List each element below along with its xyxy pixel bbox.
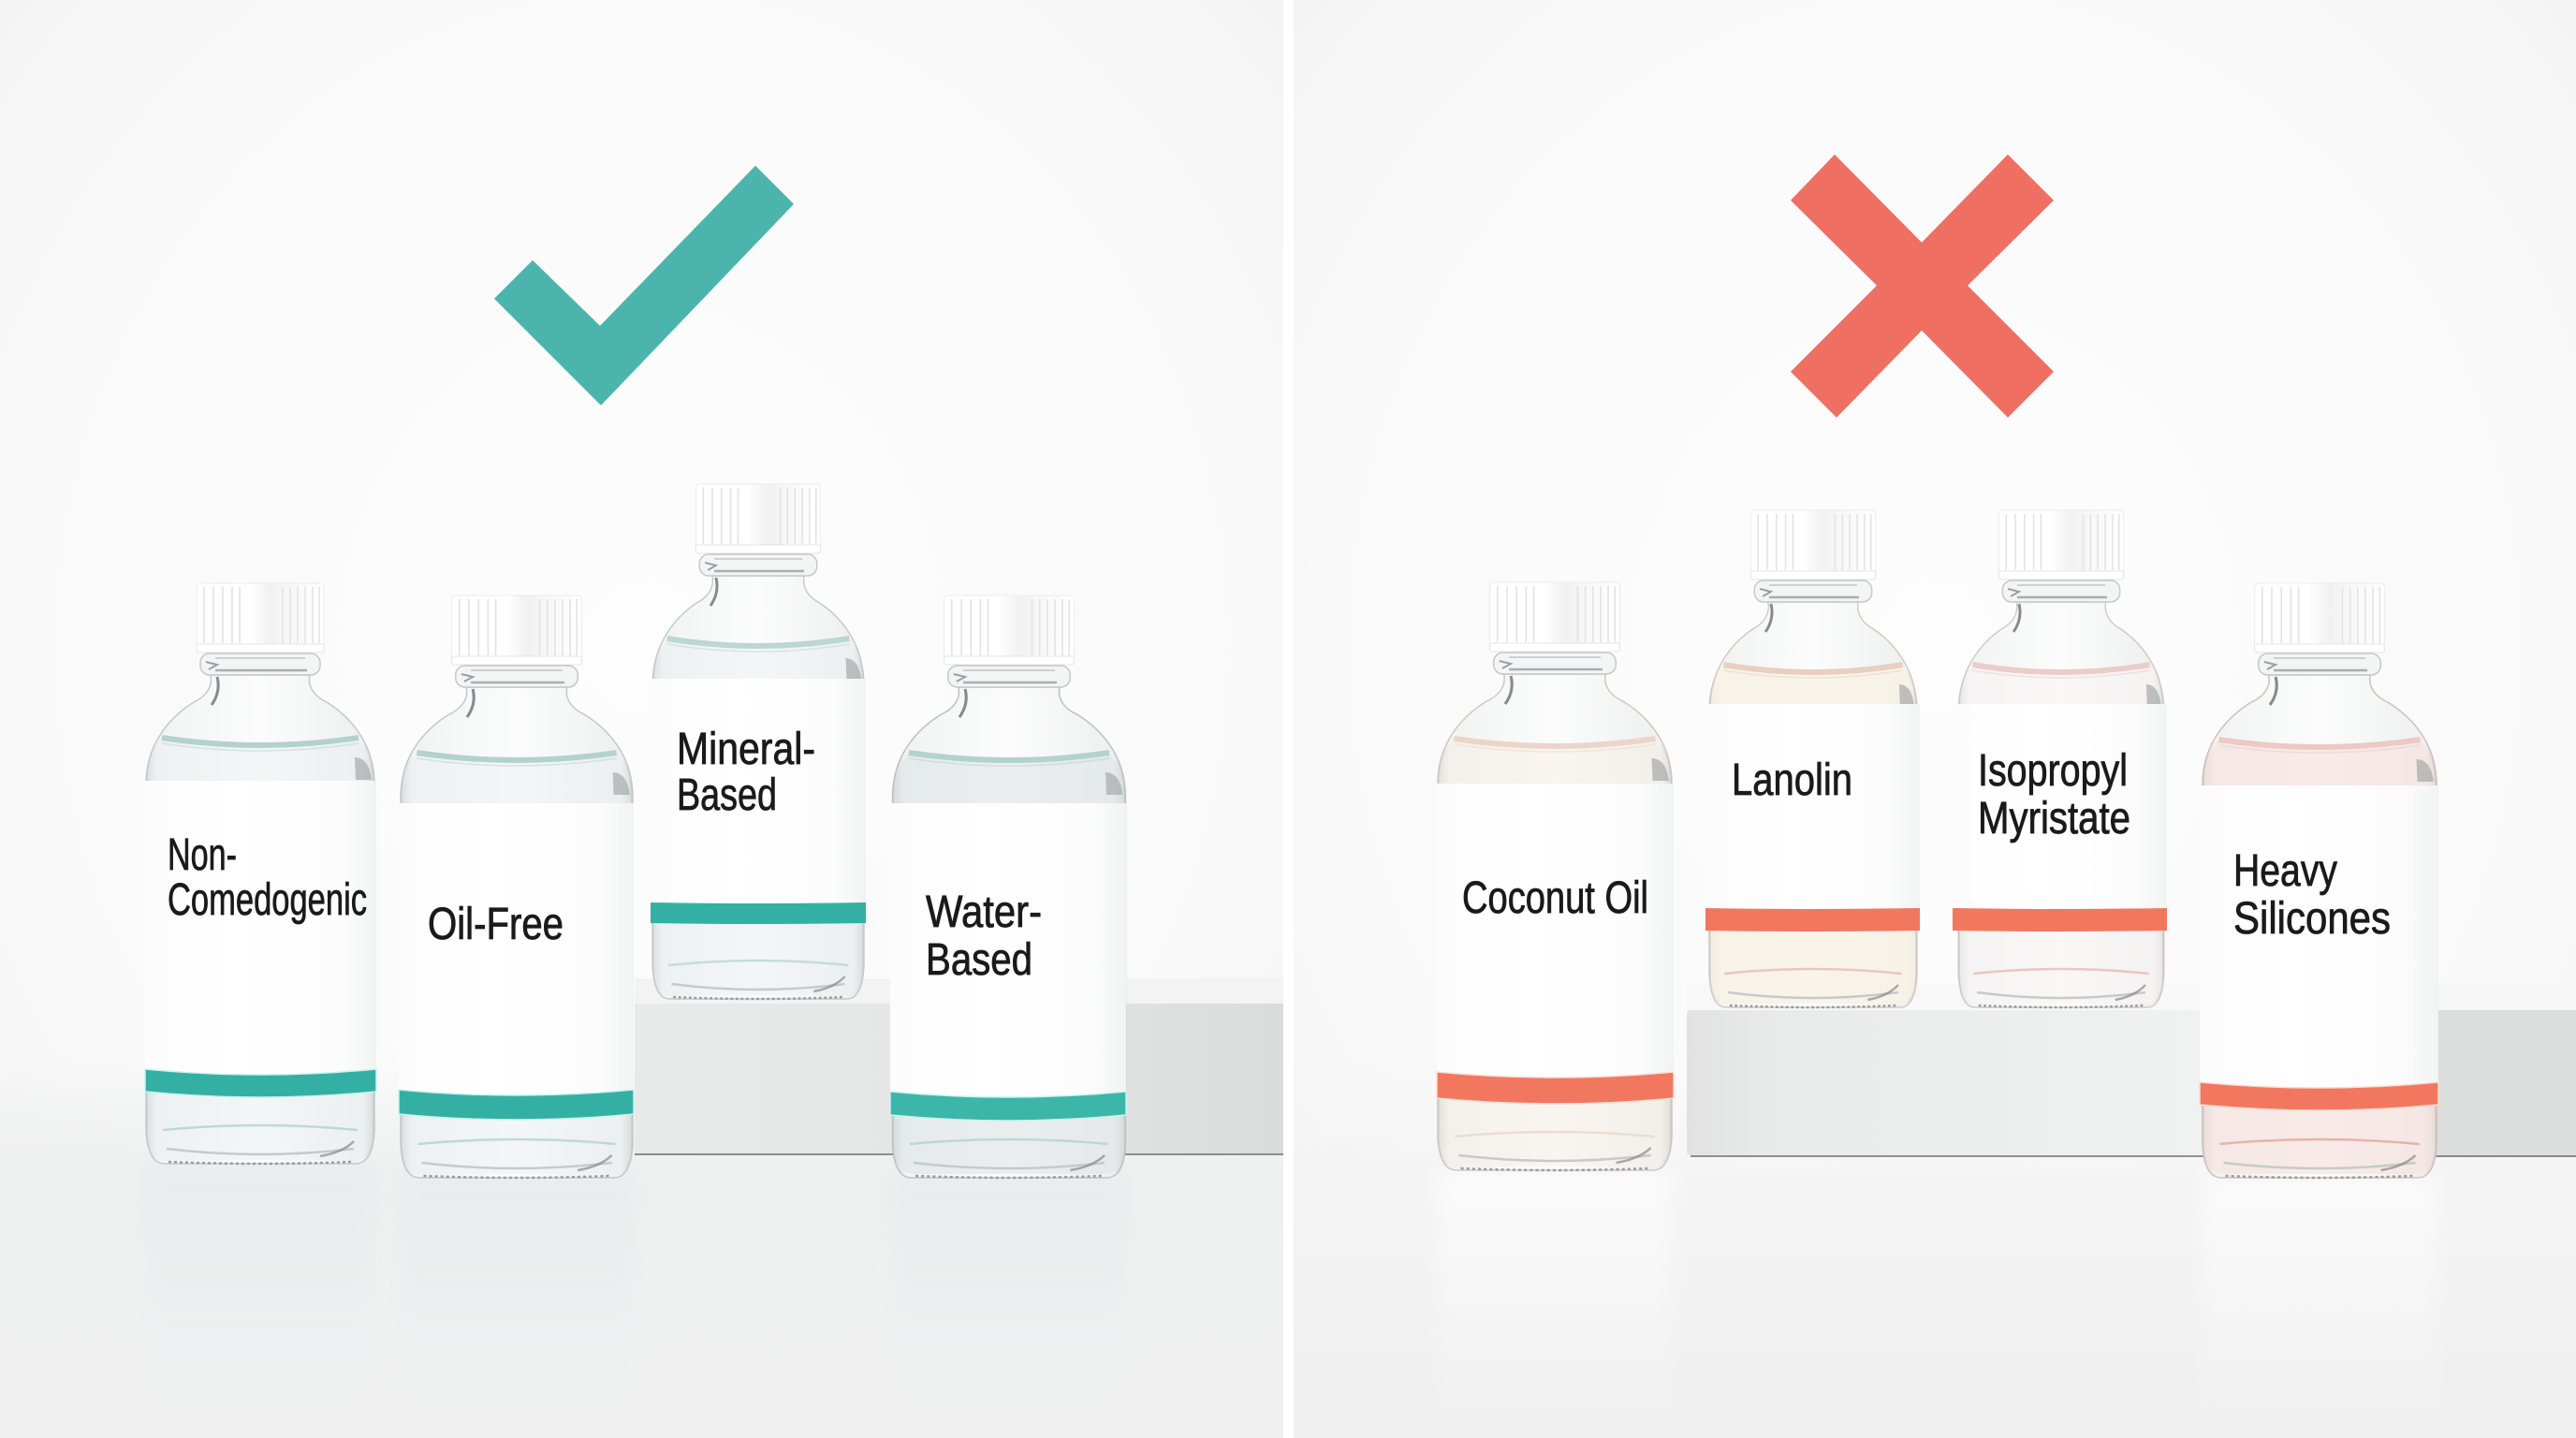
label text: Coconut Oil: Coconut Oil (1462, 873, 1648, 923)
label text: Non-Comedogenic: Non- (168, 830, 237, 880)
label text: Heavy Silicones (2233, 846, 2391, 944)
bottle: Mineral-Based (651, 484, 866, 999)
bottle: Non-Comedogenic (145, 583, 376, 1438)
label text: Isopropyl Myristate: Isopropyl (1978, 746, 2128, 796)
platform: right display step (2424, 984, 2576, 1157)
bottle: Lanolin (1705, 510, 1920, 1007)
label text: Water-Based: Water- (926, 888, 1042, 937)
label text: Isopropyl Myristate (1978, 746, 2130, 844)
bottle: Heavy Silicones (2200, 583, 2438, 1438)
bottle: Coconut Oil (1437, 582, 1674, 1438)
bottle: Oil-Free (399, 595, 634, 1438)
label text: Water-Based: Based (926, 935, 1032, 985)
icon: teal check mark (494, 166, 794, 405)
label text: Heavy Silicones: Heavy (2233, 846, 2337, 896)
label text: Heavy Silicones: Silicones (2233, 894, 2391, 944)
platform: centre display block (1687, 984, 2211, 1157)
bottle: Isopropyl Myristate (1953, 510, 2167, 1007)
label text: Water-Based (926, 888, 1042, 985)
panel: ingredients to avoid (1294, 0, 2576, 1438)
label text: Mineral-Based: Based (677, 770, 777, 820)
label text: Non-Comedogenic: Comedogenic (168, 875, 367, 925)
label text: Non-Comedogenic (168, 830, 367, 925)
platform: left display step (635, 978, 1283, 1155)
label text: Mineral-Based (677, 725, 815, 820)
icon: red cross (1791, 154, 2054, 418)
label text: Isopropyl Myristate: Myristate (1978, 794, 2130, 844)
label text: Oil-Free: Oil-Free (428, 900, 564, 949)
bottle: Water-Based (890, 595, 1126, 1438)
label text: Mineral-Based: Mineral- (677, 725, 815, 774)
label text: Lanolin: Lanolin (1732, 756, 1852, 805)
panel: recommended non-comedogenic ingredients (0, 0, 1283, 1438)
